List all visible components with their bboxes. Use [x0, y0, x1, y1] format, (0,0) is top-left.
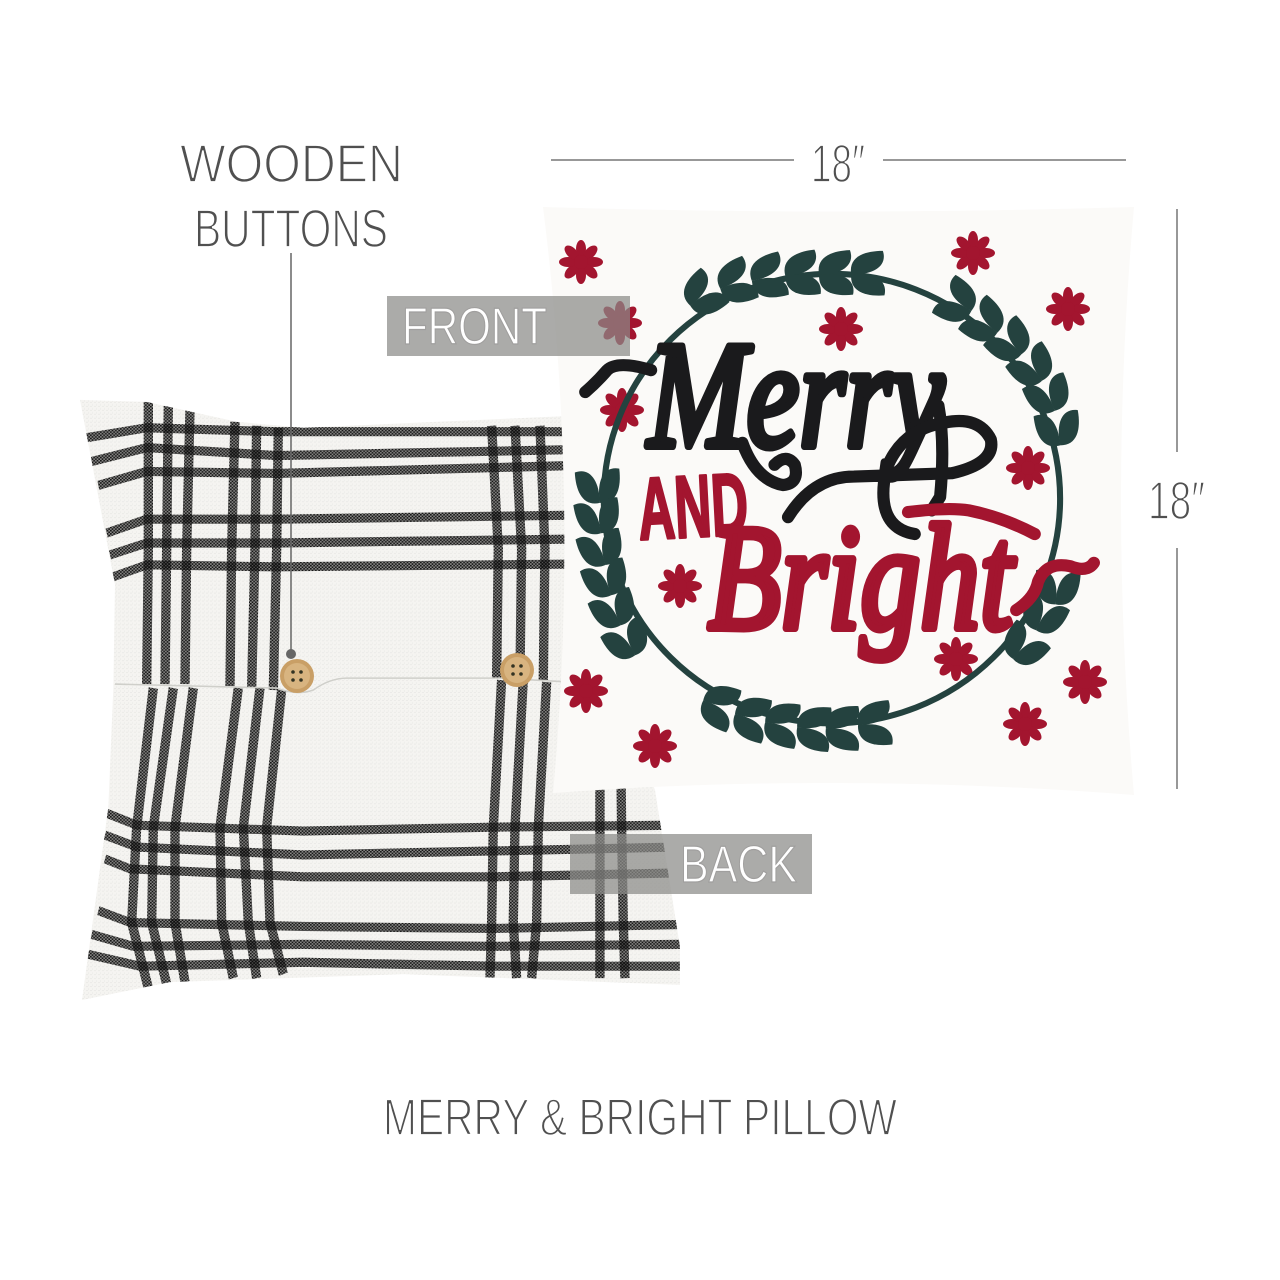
width dimension: 18″: [811, 134, 865, 194]
wooden buttons label: [180, 134, 403, 259]
wreath ring: [604, 274, 1060, 723]
front label: FRONT: [402, 298, 547, 356]
back pillow: [80, 400, 680, 1000]
snowflake flowers: [559, 231, 1107, 768]
wreath leaves: [573, 249, 1082, 752]
button right: [500, 653, 534, 687]
button left: [280, 659, 314, 693]
back label: [570, 834, 812, 894]
wooden buttons label: BUTTONS: [194, 199, 388, 259]
pointer line to button: [286, 253, 296, 659]
embroidered word: Merry: Merry: [646, 311, 944, 479]
wreath: [573, 249, 1082, 752]
height dimension: 18″: [1148, 471, 1205, 531]
embroidered word: Merry: [585, 311, 991, 534]
wooden buttons label: WOODEN: [180, 134, 403, 194]
embroidered word: AND: AND: [635, 454, 750, 559]
front pillow: [543, 207, 1134, 795]
Bright flourishes: [908, 509, 1094, 610]
embroidered word: Bright: Bright: [708, 495, 1016, 661]
flap edge: [115, 678, 570, 693]
back label: BACK: [680, 836, 797, 894]
product title: MERRY & BRIGHT PILLOW: [383, 1089, 897, 1147]
Merry flourishes: [585, 365, 991, 534]
